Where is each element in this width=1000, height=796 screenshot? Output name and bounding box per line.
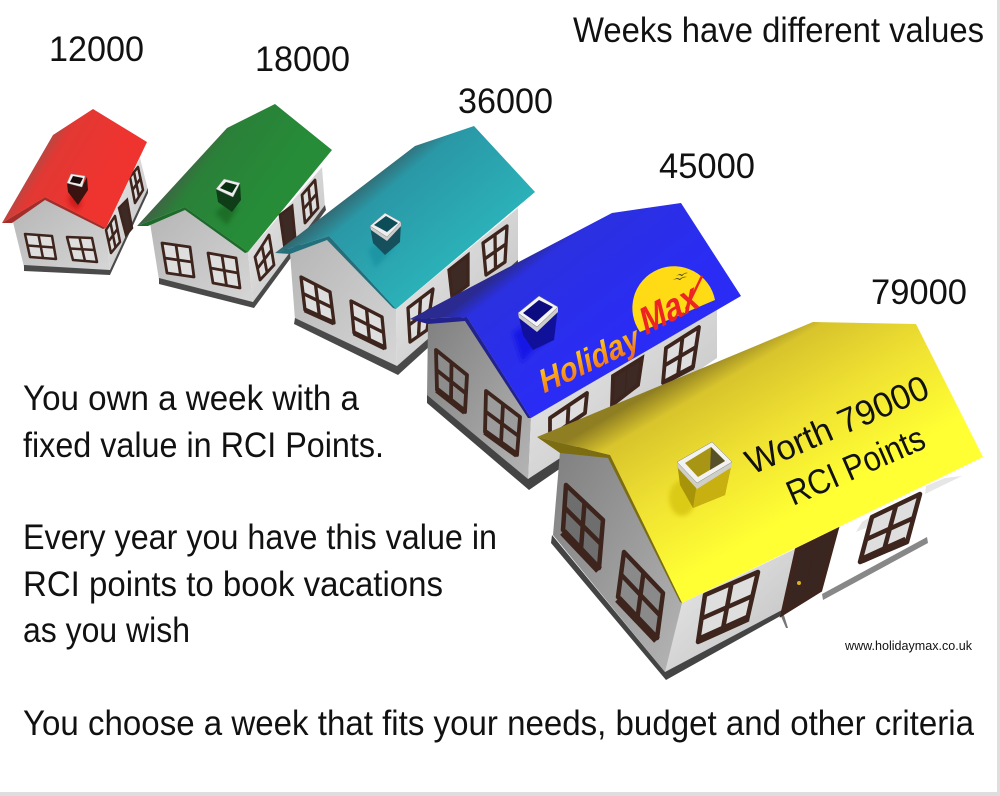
door knob (797, 581, 801, 585)
roof text: Worth 79000: Worth 79000 (740, 368, 935, 482)
chimney (370, 213, 401, 255)
website url: www.holidaymax.co.uk (844, 639, 973, 653)
chimney (677, 442, 732, 508)
chimney (216, 179, 241, 212)
logo x stroke (686, 276, 702, 309)
house: yellow, 79000 (537, 322, 983, 680)
text block: every year: Every year you have this value in (23, 518, 497, 557)
text block: every year: as you wish (23, 611, 190, 650)
chimney shadow (68, 190, 82, 210)
chimney (67, 174, 88, 205)
chimney shadow (215, 205, 238, 225)
windows and door (436, 327, 699, 455)
text block: fixed value: You own a week with a (23, 379, 359, 418)
logo: HolidayMax: Holiday (537, 319, 642, 402)
text block: fixed value: fixed value in RCI Points. (23, 426, 384, 465)
logo birds (673, 273, 688, 280)
value label 18000: 18000 (255, 40, 350, 79)
text block: every year: RCI points to book vacations (23, 565, 443, 604)
house: red, 12000 (2, 109, 148, 275)
text block: fixed value (23, 379, 384, 465)
house: blue, 45000 (410, 203, 741, 490)
logo: HolidayMax: Max (637, 273, 702, 345)
windows and door (563, 485, 920, 642)
text block: every year (23, 518, 497, 650)
windows and door (25, 167, 143, 262)
house: teal, 36000 (275, 126, 535, 375)
text block: you choose: You choose a week that fits your needs, budget and other criteria (23, 704, 975, 743)
chimney shadow (669, 480, 695, 516)
value label 79000: 79000 (871, 273, 967, 312)
roof text: RCI Points: RCI Points (781, 419, 931, 513)
logo: HolidayMax (537, 266, 715, 402)
windows and door (301, 226, 507, 348)
value label 12000: 12000 (49, 30, 144, 69)
chimney shadow (513, 325, 548, 362)
value label 45000: 45000 (659, 147, 755, 186)
logo sun (632, 266, 715, 332)
value label 36000: 36000 (458, 82, 553, 121)
chimney shadow (368, 240, 396, 268)
heading: weeks have different values: Weeks have different values (573, 11, 984, 50)
house: green, 18000 (137, 104, 332, 308)
chimney (518, 296, 558, 350)
windows and door (162, 180, 318, 288)
